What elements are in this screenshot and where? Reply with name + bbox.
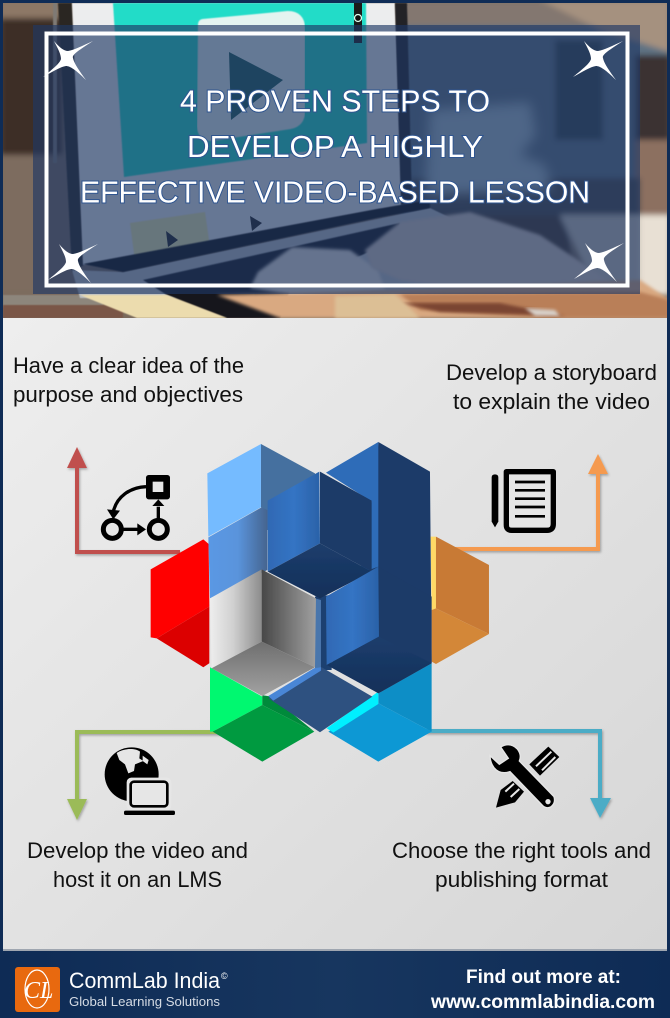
- cube: light blue top: [207, 444, 315, 598]
- main panel background: [3, 318, 667, 950]
- cube: cyan blue: [327, 663, 432, 762]
- footer call to action: Find out more at:: [466, 967, 621, 988]
- step text: storyboard: to explain the video: [453, 389, 650, 414]
- cube: red: [151, 539, 209, 667]
- company name: [69, 968, 228, 1009]
- icon: globe and laptop: [105, 747, 175, 815]
- step text: develop and host: Develop the video and: [27, 838, 248, 863]
- title frame: [46, 34, 628, 286]
- company name: ©: [221, 971, 228, 981]
- hands: [250, 247, 385, 296]
- footer call to action: [430, 967, 655, 1013]
- laptop hinge and base: [72, 208, 454, 298]
- cube: dark right column: [315, 442, 432, 693]
- title: [80, 84, 590, 210]
- photo: hands typing on laptop playing a video: [0, 0, 670, 318]
- cube: green: [210, 667, 314, 762]
- cube: lower right: [326, 567, 432, 693]
- icon: document and pencil: [492, 472, 553, 530]
- step text: storyboard: [446, 360, 657, 414]
- company name: Global Learning Solutions: [69, 994, 220, 1009]
- logo: CommLab India: [15, 967, 60, 1012]
- footer call to action: www.commlabindia.com: [430, 992, 655, 1013]
- step text: purpose and objectives: [13, 353, 244, 407]
- cube: centre: [268, 472, 372, 598]
- cube: gray: [210, 569, 316, 696]
- title panel: translucent navy overlay: [33, 25, 640, 294]
- step text: develop and host: host it on an LMS: [53, 867, 222, 892]
- footer bar: [0, 949, 670, 1018]
- coffee cup and saucer: [425, 102, 552, 195]
- company name: CommLab India: [69, 968, 221, 993]
- title: EFFECTIVE VIDEO-BASED LESSON: [80, 174, 590, 210]
- step text: storyboard: Develop a storyboard: [446, 360, 657, 385]
- arrow: orange: [455, 454, 608, 549]
- title: DEVELOP A HIGHLY: [187, 129, 483, 164]
- arrow: red: [67, 447, 180, 552]
- step text: tools and format: [392, 838, 651, 892]
- laptop screen: [58, 3, 84, 272]
- step text: purpose and objectives: Have a clear idea of the: [13, 353, 244, 378]
- step text: tools and format: Choose the right tools and: [392, 838, 651, 863]
- step text: purpose and objectives: purpose and objectives: [13, 382, 243, 407]
- icon: wrench and pencil: [490, 745, 559, 808]
- arrow: green: [67, 732, 220, 820]
- cube: orange: [431, 537, 489, 664]
- logo: CommLab India: CL: [24, 978, 53, 1004]
- icon: process flow: [103, 475, 170, 538]
- 3D cube cluster: [151, 442, 489, 762]
- wood table lower left: [3, 295, 103, 307]
- arrow: blue: [425, 731, 611, 818]
- title: 4 PROVEN STEPS TO: [180, 84, 490, 118]
- step text: tools and format: publishing format: [435, 867, 608, 892]
- cube: bottom navy: [268, 598, 372, 732]
- step text: develop and host: [27, 838, 248, 892]
- corner stars: [43, 41, 624, 283]
